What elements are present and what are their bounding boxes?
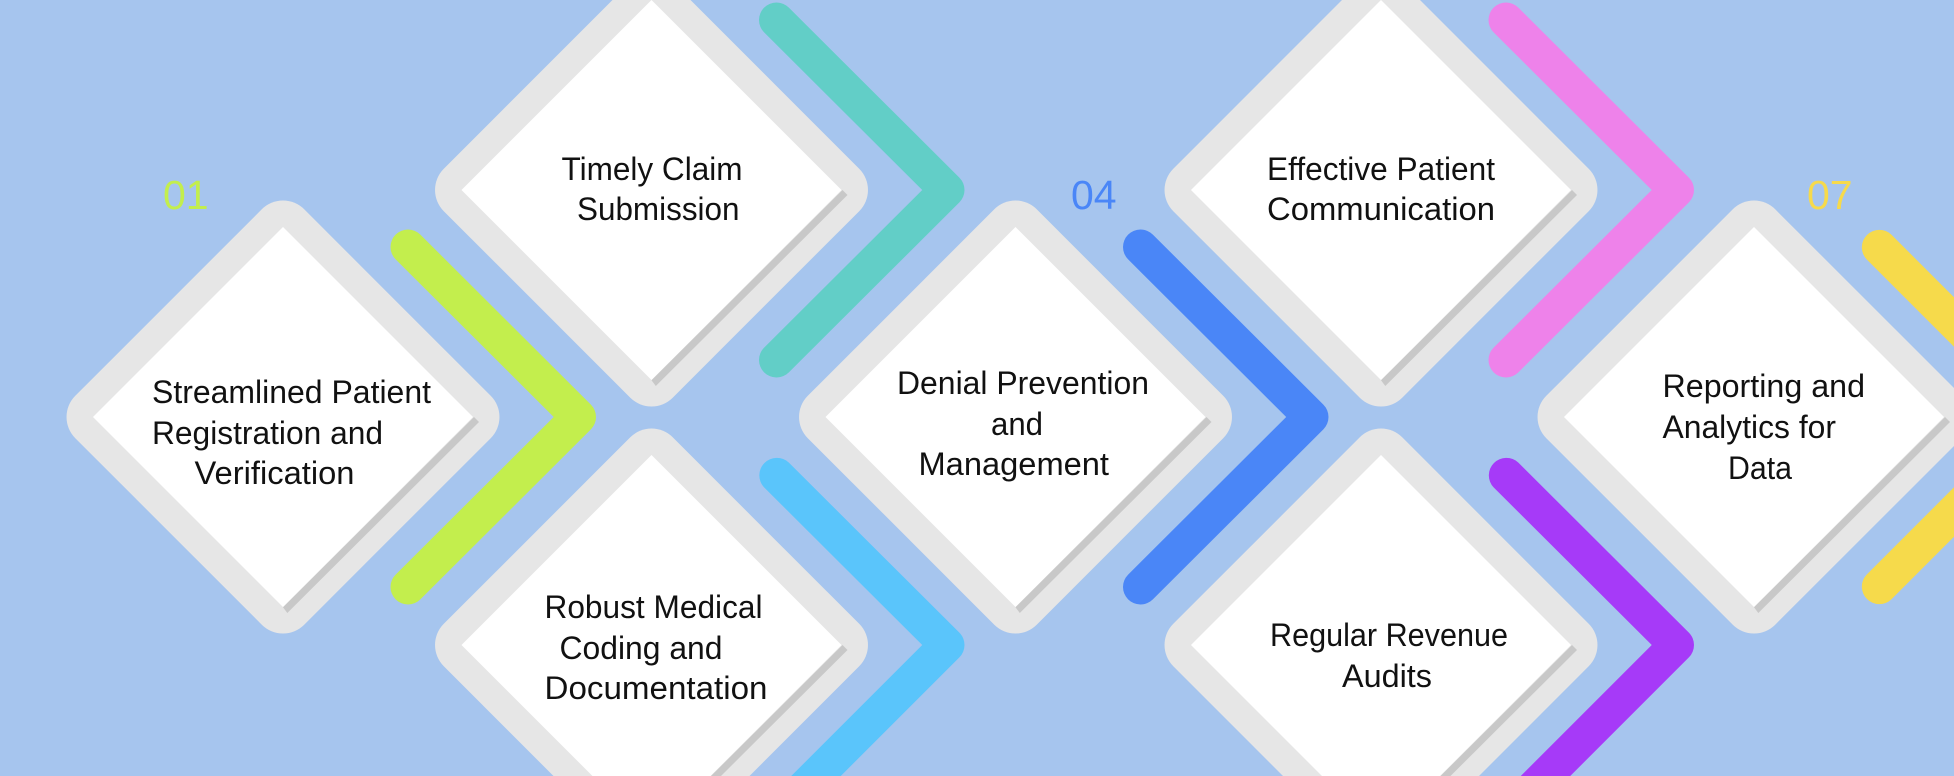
text: step 7 label: Reporting and	[1662, 368, 1865, 404]
text: step 4 label: Denial Prevention	[897, 365, 1149, 401]
diamond card 2	[435, 0, 868, 406]
panel: step 6 regular revenue audits	[1165, 429, 1694, 776]
chevron arrow 5	[1506, 20, 1676, 360]
text: step 6 label: Regular Revenue	[1270, 617, 1508, 653]
diamond card 3	[435, 429, 868, 776]
text: step 2 label: Timely Claim	[562, 151, 742, 187]
panel: step 4 denial prevention	[799, 172, 1311, 633]
chevron arrow 6	[1489, 458, 1694, 776]
panel: step 1 streamlined patient registration	[67, 172, 578, 633]
panel: step 7 reporting and analytics	[1538, 172, 1954, 633]
text: step 5 label: Effective Patient	[1267, 151, 1495, 187]
text: step 3 label: Coding and	[560, 630, 722, 666]
chevron arrow 3	[759, 458, 964, 776]
text: step 1 label: Verification	[194, 455, 354, 491]
chevron arrow 4	[1140, 247, 1311, 587]
diamond card 1	[67, 201, 499, 633]
text: step 4 label: and	[991, 406, 1043, 442]
text: step 3 label: Robust Medical	[544, 589, 762, 625]
text: step 2 label: Submission	[577, 191, 740, 227]
text: step 5 label: Communication	[1267, 191, 1495, 227]
chevron arrow 2	[776, 20, 947, 360]
panel: step 3 robust medical coding	[435, 429, 964, 776]
number 01: 01	[163, 172, 209, 218]
text: step 6 label: Audits	[1342, 658, 1432, 694]
text: step 7 label: Data	[1728, 450, 1792, 486]
text: step 3 label: Documentation	[544, 670, 768, 706]
diamond card 7	[1538, 201, 1954, 633]
panel: step 5 effective patient communication	[1165, 0, 1676, 406]
number 04: 04	[1071, 172, 1117, 218]
text: step 1 label: Registration and	[152, 415, 383, 451]
panel: step 2 timely claim submission	[435, 0, 947, 406]
diamond card 5	[1165, 0, 1597, 406]
number 07: 07	[1807, 172, 1853, 218]
chevron arrow 7	[1862, 230, 1954, 604]
diamond card 4	[799, 201, 1232, 633]
text: step 7 label: Analytics for	[1662, 409, 1836, 445]
chevron arrow 1	[408, 247, 578, 587]
diamond card 6	[1165, 429, 1597, 776]
text: step 1 label: Streamlined Patient	[152, 374, 431, 410]
text: step 4 label: Management	[918, 446, 1109, 482]
